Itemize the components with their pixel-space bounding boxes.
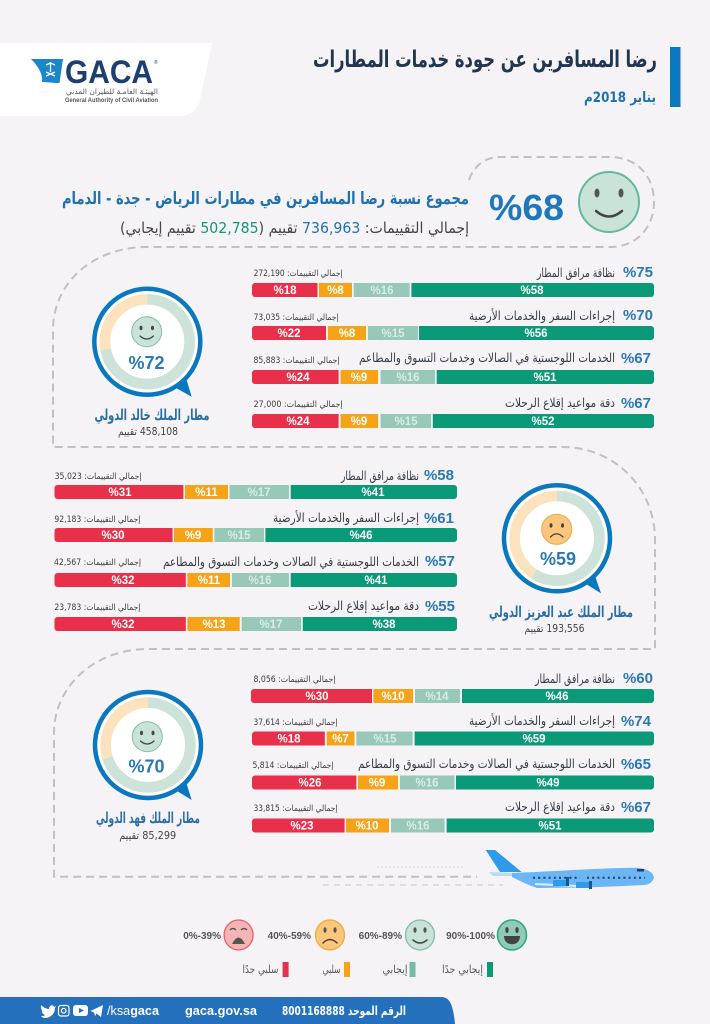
stacked bar: %10 bbox=[355, 820, 379, 832]
key label: إيجابي جدًا bbox=[442, 963, 483, 976]
ratings total: إجمالي التقييمات: 73,035 bbox=[254, 313, 339, 323]
panel: King Fahd airport bbox=[95, 670, 654, 842]
legend: colour key bbox=[242, 962, 493, 977]
panel: King Khalid airport bbox=[94, 264, 654, 438]
stacked bar bbox=[54, 528, 457, 542]
stacked bar: %15 bbox=[373, 734, 397, 746]
row: logistics, retail and food services bbox=[252, 350, 654, 384]
stacked bar: %11 bbox=[195, 487, 218, 499]
stacked bar: %41 bbox=[364, 575, 388, 587]
icon: twitter bbox=[41, 1005, 56, 1018]
icon: negative face bbox=[316, 920, 344, 950]
stacked bar: %30 bbox=[305, 691, 329, 703]
icon: very negative face bbox=[224, 920, 253, 950]
stacked bar: %16 bbox=[415, 778, 439, 790]
metric score: %61 bbox=[424, 510, 454, 527]
stacked bar: %8 bbox=[327, 285, 344, 297]
airport donut badge bbox=[94, 289, 200, 397]
ratings total: إجمالي التقييمات: 42,567 bbox=[54, 558, 141, 568]
stacked bar bbox=[251, 689, 654, 703]
metric label: إجراءات السفر والخدمات الأرضية bbox=[273, 510, 419, 526]
stacked bar: %18 bbox=[277, 734, 301, 746]
ratings total: إجمالي التقييمات: 8,056 bbox=[254, 675, 336, 685]
ratings total: إجمالي التقييمات: 272,190 bbox=[254, 269, 343, 279]
metric score: %60 bbox=[623, 670, 653, 687]
row: travel and ground services bbox=[252, 307, 654, 340]
row: travel and ground services bbox=[54, 510, 457, 542]
overall heading: مجموع نسبة رضا المسافرين في مطارات الرياض - جدة - الدمام bbox=[62, 189, 469, 209]
stacked bar bbox=[252, 732, 654, 746]
icon: sad face bbox=[542, 514, 572, 544]
stacked bar: %49 bbox=[536, 778, 560, 790]
ratings total: إجمالي التقييمات: 85,883 bbox=[254, 356, 340, 366]
swatch positive bbox=[410, 962, 416, 977]
stacked bar bbox=[252, 776, 654, 790]
stacked bar: %10 bbox=[381, 691, 405, 703]
ratings total: إجمالي التقييمات: 27,000 bbox=[254, 400, 343, 410]
metric score: %55 bbox=[425, 598, 455, 615]
stacked bar: %9 bbox=[369, 778, 385, 790]
range label: 40%-59% bbox=[268, 931, 311, 942]
metric label: نظافة مرافق المطار bbox=[340, 468, 419, 484]
icon: very positive face bbox=[498, 920, 526, 950]
row: facilities cleanliness bbox=[251, 670, 654, 703]
stacked bar: %23 bbox=[290, 820, 314, 832]
metric score: %67 bbox=[621, 350, 651, 367]
stacked bar: %56 bbox=[524, 328, 548, 340]
icon: smiling face bbox=[132, 722, 162, 752]
range label: 60%-89% bbox=[359, 931, 402, 942]
stacked bar: %58 bbox=[520, 285, 544, 297]
subtitle date: يناير 2018م bbox=[584, 90, 656, 106]
stacked bar: %16 bbox=[396, 372, 420, 384]
stacked bar: %24 bbox=[286, 372, 310, 384]
overall totals: إجمالي التقييمات: 736,963 تقييم (502,785 تقييم إيجابي) bbox=[120, 219, 469, 238]
stacked bar: %11 bbox=[198, 575, 221, 587]
logo wordmark: GACA bbox=[65, 54, 153, 90]
stacked bar bbox=[54, 485, 457, 499]
icon: instagram bbox=[58, 1006, 69, 1016]
icon: airplane bbox=[486, 850, 654, 889]
key label: سلبي جدًا bbox=[242, 963, 278, 976]
ratings total: إجمالي التقييمات: 92,183 bbox=[54, 515, 140, 525]
stacked bar: %16 bbox=[406, 820, 430, 832]
metric score: %75 bbox=[623, 264, 653, 281]
stacked bar: %15 bbox=[227, 530, 251, 542]
stacked bar bbox=[252, 370, 654, 384]
stacked bar: %9 bbox=[351, 416, 367, 428]
stacked bar: %51 bbox=[533, 372, 557, 384]
stacked bar: %18 bbox=[273, 285, 297, 297]
legend: satisfaction ranges bbox=[183, 920, 526, 950]
registered mark: ® bbox=[154, 59, 158, 66]
row: logistics, retail and food services bbox=[252, 756, 654, 790]
icon: smiling face bbox=[579, 172, 639, 232]
stacked bar: %17 bbox=[259, 619, 283, 631]
stacked bar: %32 bbox=[111, 619, 135, 631]
swatch very negative bbox=[283, 962, 289, 977]
stacked bar: %14 bbox=[425, 691, 449, 703]
stacked bar: %15 bbox=[394, 416, 418, 428]
stacked bar: %41 bbox=[361, 487, 385, 499]
airport score: %72 bbox=[128, 353, 165, 373]
overall percentage: %68 bbox=[489, 187, 564, 228]
row: flight punctuality bbox=[252, 395, 654, 428]
stacked bar: %16 bbox=[248, 575, 272, 587]
stacked bar: %9 bbox=[351, 372, 367, 384]
row: flight punctuality bbox=[54, 598, 457, 631]
key label: إيجابي bbox=[382, 963, 408, 976]
stacked bar: %26 bbox=[298, 778, 322, 790]
icon: telegram bbox=[90, 1005, 103, 1017]
metric score: %70 bbox=[623, 307, 653, 324]
panel: King Abdulaziz airport bbox=[54, 467, 633, 635]
ratings total: إجمالي التقييمات: 5,814 bbox=[252, 761, 334, 771]
stacked bar: %46 bbox=[545, 691, 569, 703]
stacked bar: %31 bbox=[108, 487, 132, 499]
metric label: نظافة مرافق المطار bbox=[536, 265, 615, 281]
stacked bar: %8 bbox=[339, 328, 356, 340]
stacked bar: %13 bbox=[202, 619, 226, 631]
metric label: دقة مواعيد إقلاع الرحلات bbox=[308, 598, 419, 614]
stacked bar: %51 bbox=[538, 820, 562, 832]
stacked bar: %46 bbox=[349, 530, 373, 542]
logo panel bbox=[0, 43, 212, 116]
metric label: الخدمات اللوجستية في الصالات وخدمات التسوق والمطاعم bbox=[163, 554, 419, 570]
ratings total: إجمالي التقييمات: 37,614 bbox=[254, 718, 338, 728]
logo english name: General Authority of Civil Aviation bbox=[65, 97, 158, 104]
airport name: مطار الملك خالد الدولي bbox=[94, 406, 210, 424]
row: facilities cleanliness bbox=[54, 467, 457, 499]
stacked bar: %7 bbox=[332, 734, 349, 746]
stacked bar: %15 bbox=[381, 328, 405, 340]
footer bar bbox=[0, 997, 455, 1024]
airport name: مطار الملك فهد الدولي bbox=[96, 809, 200, 827]
social handle: /ksagaca bbox=[107, 1004, 160, 1018]
stacked bar: %9 bbox=[185, 530, 201, 542]
stacked bar bbox=[252, 414, 654, 428]
metric label: دقة مواعيد إقلاع الرحلات bbox=[505, 799, 615, 815]
range label: 0%-39% bbox=[183, 931, 221, 942]
metric label: نظافة مرافق المطار bbox=[534, 671, 615, 687]
ratings total: إجمالي التقييمات: 33,815 bbox=[254, 804, 338, 814]
stacked bar: %59 bbox=[522, 734, 546, 746]
metric score: %57 bbox=[425, 553, 455, 570]
stacked bar: %16 bbox=[370, 285, 394, 297]
stacked bar bbox=[54, 617, 457, 631]
key label: سلبي bbox=[323, 963, 341, 976]
airport donut badge bbox=[95, 692, 201, 800]
airport score: %59 bbox=[540, 549, 576, 569]
stacked bar: %32 bbox=[111, 575, 135, 587]
ratings total: إجمالي التقييمات: 35,023 bbox=[55, 472, 142, 482]
metric score: %67 bbox=[621, 799, 651, 816]
ratings total: إجمالي التقييمات: 23,783 bbox=[54, 603, 140, 613]
icon: smiling face bbox=[132, 317, 162, 347]
metric label: إجراءات السفر والخدمات الأرضية bbox=[469, 713, 615, 729]
stacked bar: %38 bbox=[372, 619, 396, 631]
icon: youtube bbox=[73, 1005, 88, 1016]
airport rating count: 193,556 تقييم bbox=[524, 623, 585, 635]
row: logistics, retail and food services bbox=[54, 553, 457, 587]
stacked bar: %22 bbox=[277, 328, 301, 340]
title accent bar bbox=[670, 47, 680, 107]
airport donut badge bbox=[504, 485, 610, 593]
airport rating count: 85,299 تقييم bbox=[119, 830, 176, 842]
panel: overall satisfaction bbox=[62, 172, 639, 238]
metric score: %58 bbox=[424, 467, 454, 484]
metric score: %74 bbox=[621, 713, 652, 730]
stacked bar bbox=[54, 573, 457, 587]
metric label: إجراءات السفر والخدمات الأرضية bbox=[469, 308, 615, 324]
row: flight punctuality bbox=[252, 799, 654, 832]
stacked bar: %52 bbox=[531, 416, 555, 428]
range label: 90%-100% bbox=[446, 931, 495, 942]
metric score: %67 bbox=[621, 395, 651, 412]
airport score: %70 bbox=[128, 757, 165, 777]
website: gaca.gov.sa bbox=[185, 1004, 258, 1018]
airport name: مطار الملك عبد العزيز الدولي bbox=[489, 603, 633, 621]
swatch negative bbox=[344, 962, 350, 977]
stacked bar bbox=[252, 283, 654, 297]
stacked bar: %17 bbox=[247, 487, 271, 499]
icon: GACA emblem flag bbox=[31, 59, 63, 83]
logo arabic name: الهيئـة العامـة للطيران المدني bbox=[66, 87, 158, 96]
metric label: دقة مواعيد إقلاع الرحلات bbox=[505, 395, 615, 411]
icon: positive face bbox=[406, 920, 434, 950]
row: travel and ground services bbox=[252, 713, 654, 746]
airport rating count: 458,108 تقييم bbox=[118, 426, 178, 438]
stacked bar: %30 bbox=[101, 530, 125, 542]
metric label: الخدمات اللوجستية في الصالات وخدمات التسوق والمطاعم bbox=[358, 756, 615, 772]
metric label: الخدمات اللوجستية في الصالات وخدمات التسوق والمطاعم bbox=[359, 350, 615, 366]
stacked bar bbox=[252, 818, 654, 832]
row: facilities cleanliness bbox=[252, 264, 654, 297]
swatch very positive bbox=[487, 962, 493, 977]
stacked bar bbox=[252, 326, 654, 340]
stacked bar: %24 bbox=[286, 416, 310, 428]
metric score: %65 bbox=[621, 756, 651, 773]
hotline: الرقم الموحد 8001168888 bbox=[282, 1003, 406, 1018]
